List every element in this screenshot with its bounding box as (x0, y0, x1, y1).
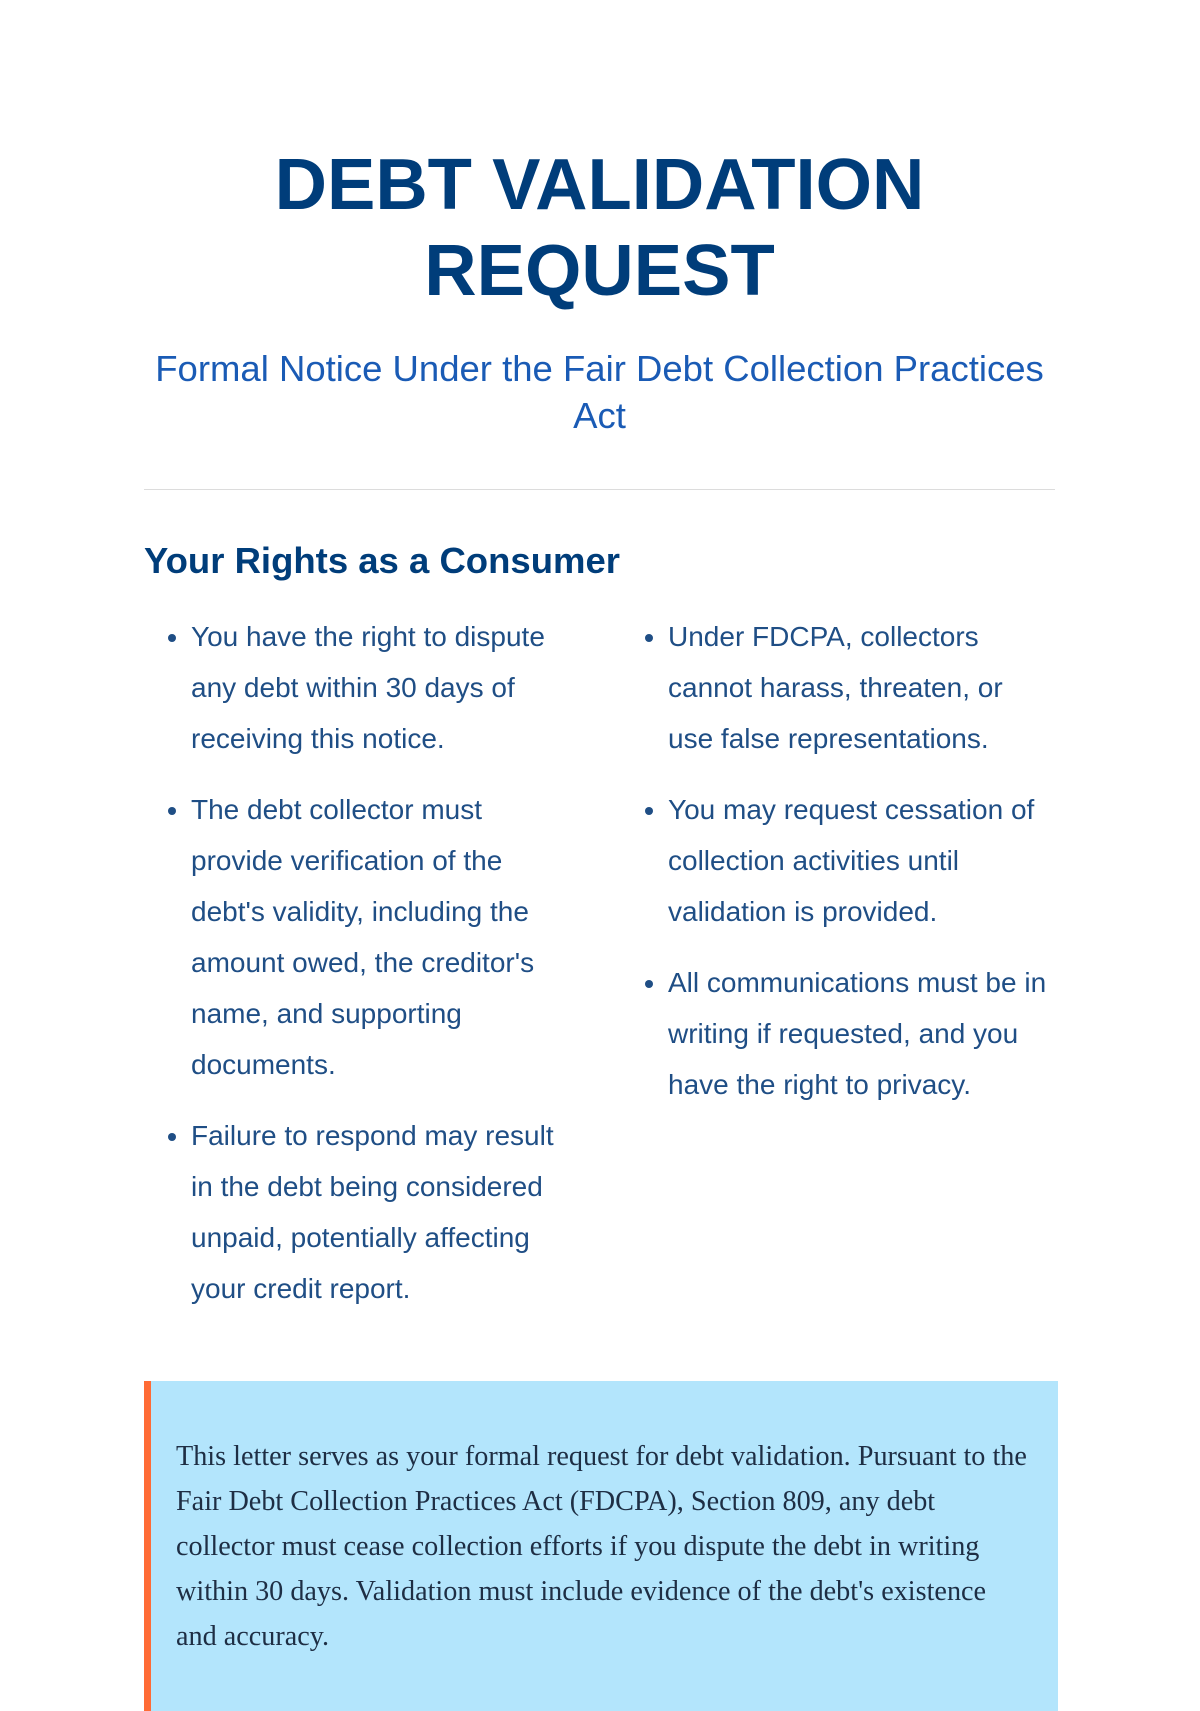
left column: You have the right to dispute any debt within 30 days of receiving this notice. (191, 621, 545, 754)
rights list columns (168, 621, 1046, 1304)
right column: Under FDCPA, collectors cannot harass, threaten, or use false representations. (668, 621, 1003, 754)
left column: The debt collector must provide verification of the debt's validity, including the amount owed, the creditor's name, and supporting documents. (191, 794, 534, 1080)
title: REQUEST (424, 230, 775, 311)
subtitle: Act (573, 395, 626, 436)
right column: All communications must be in writing if requested, and you have the right to privacy. (668, 967, 1046, 1100)
subtitle: Formal Notice Under the Fair Debt Collection Practices (155, 348, 1044, 389)
callout: formal request notice (144, 1381, 1058, 1711)
subtitle (155, 348, 1044, 436)
title: DEBT VALIDATION (275, 144, 924, 225)
left column (168, 621, 554, 1304)
title (275, 144, 924, 311)
right column (645, 621, 1046, 1100)
callout: formal request notice: This letter serves as your formal request for debt validation. Pursuant to the Fair Debt Collection Practices Act (FDCPA), Section 809, any debt collector must cease collection efforts if you dispute the debt in writing within 30 days. Validation must include evidence of the debt's existence and accuracy. (176, 1441, 1027, 1652)
heading: your rights: Your Rights as a Consumer (144, 540, 620, 581)
left column: Failure to respond may result in the debt being considered unpaid, potentially affecting your credit report. (191, 1120, 554, 1304)
right column: You may request cessation of collection activities until validation is provided. (668, 794, 1034, 927)
